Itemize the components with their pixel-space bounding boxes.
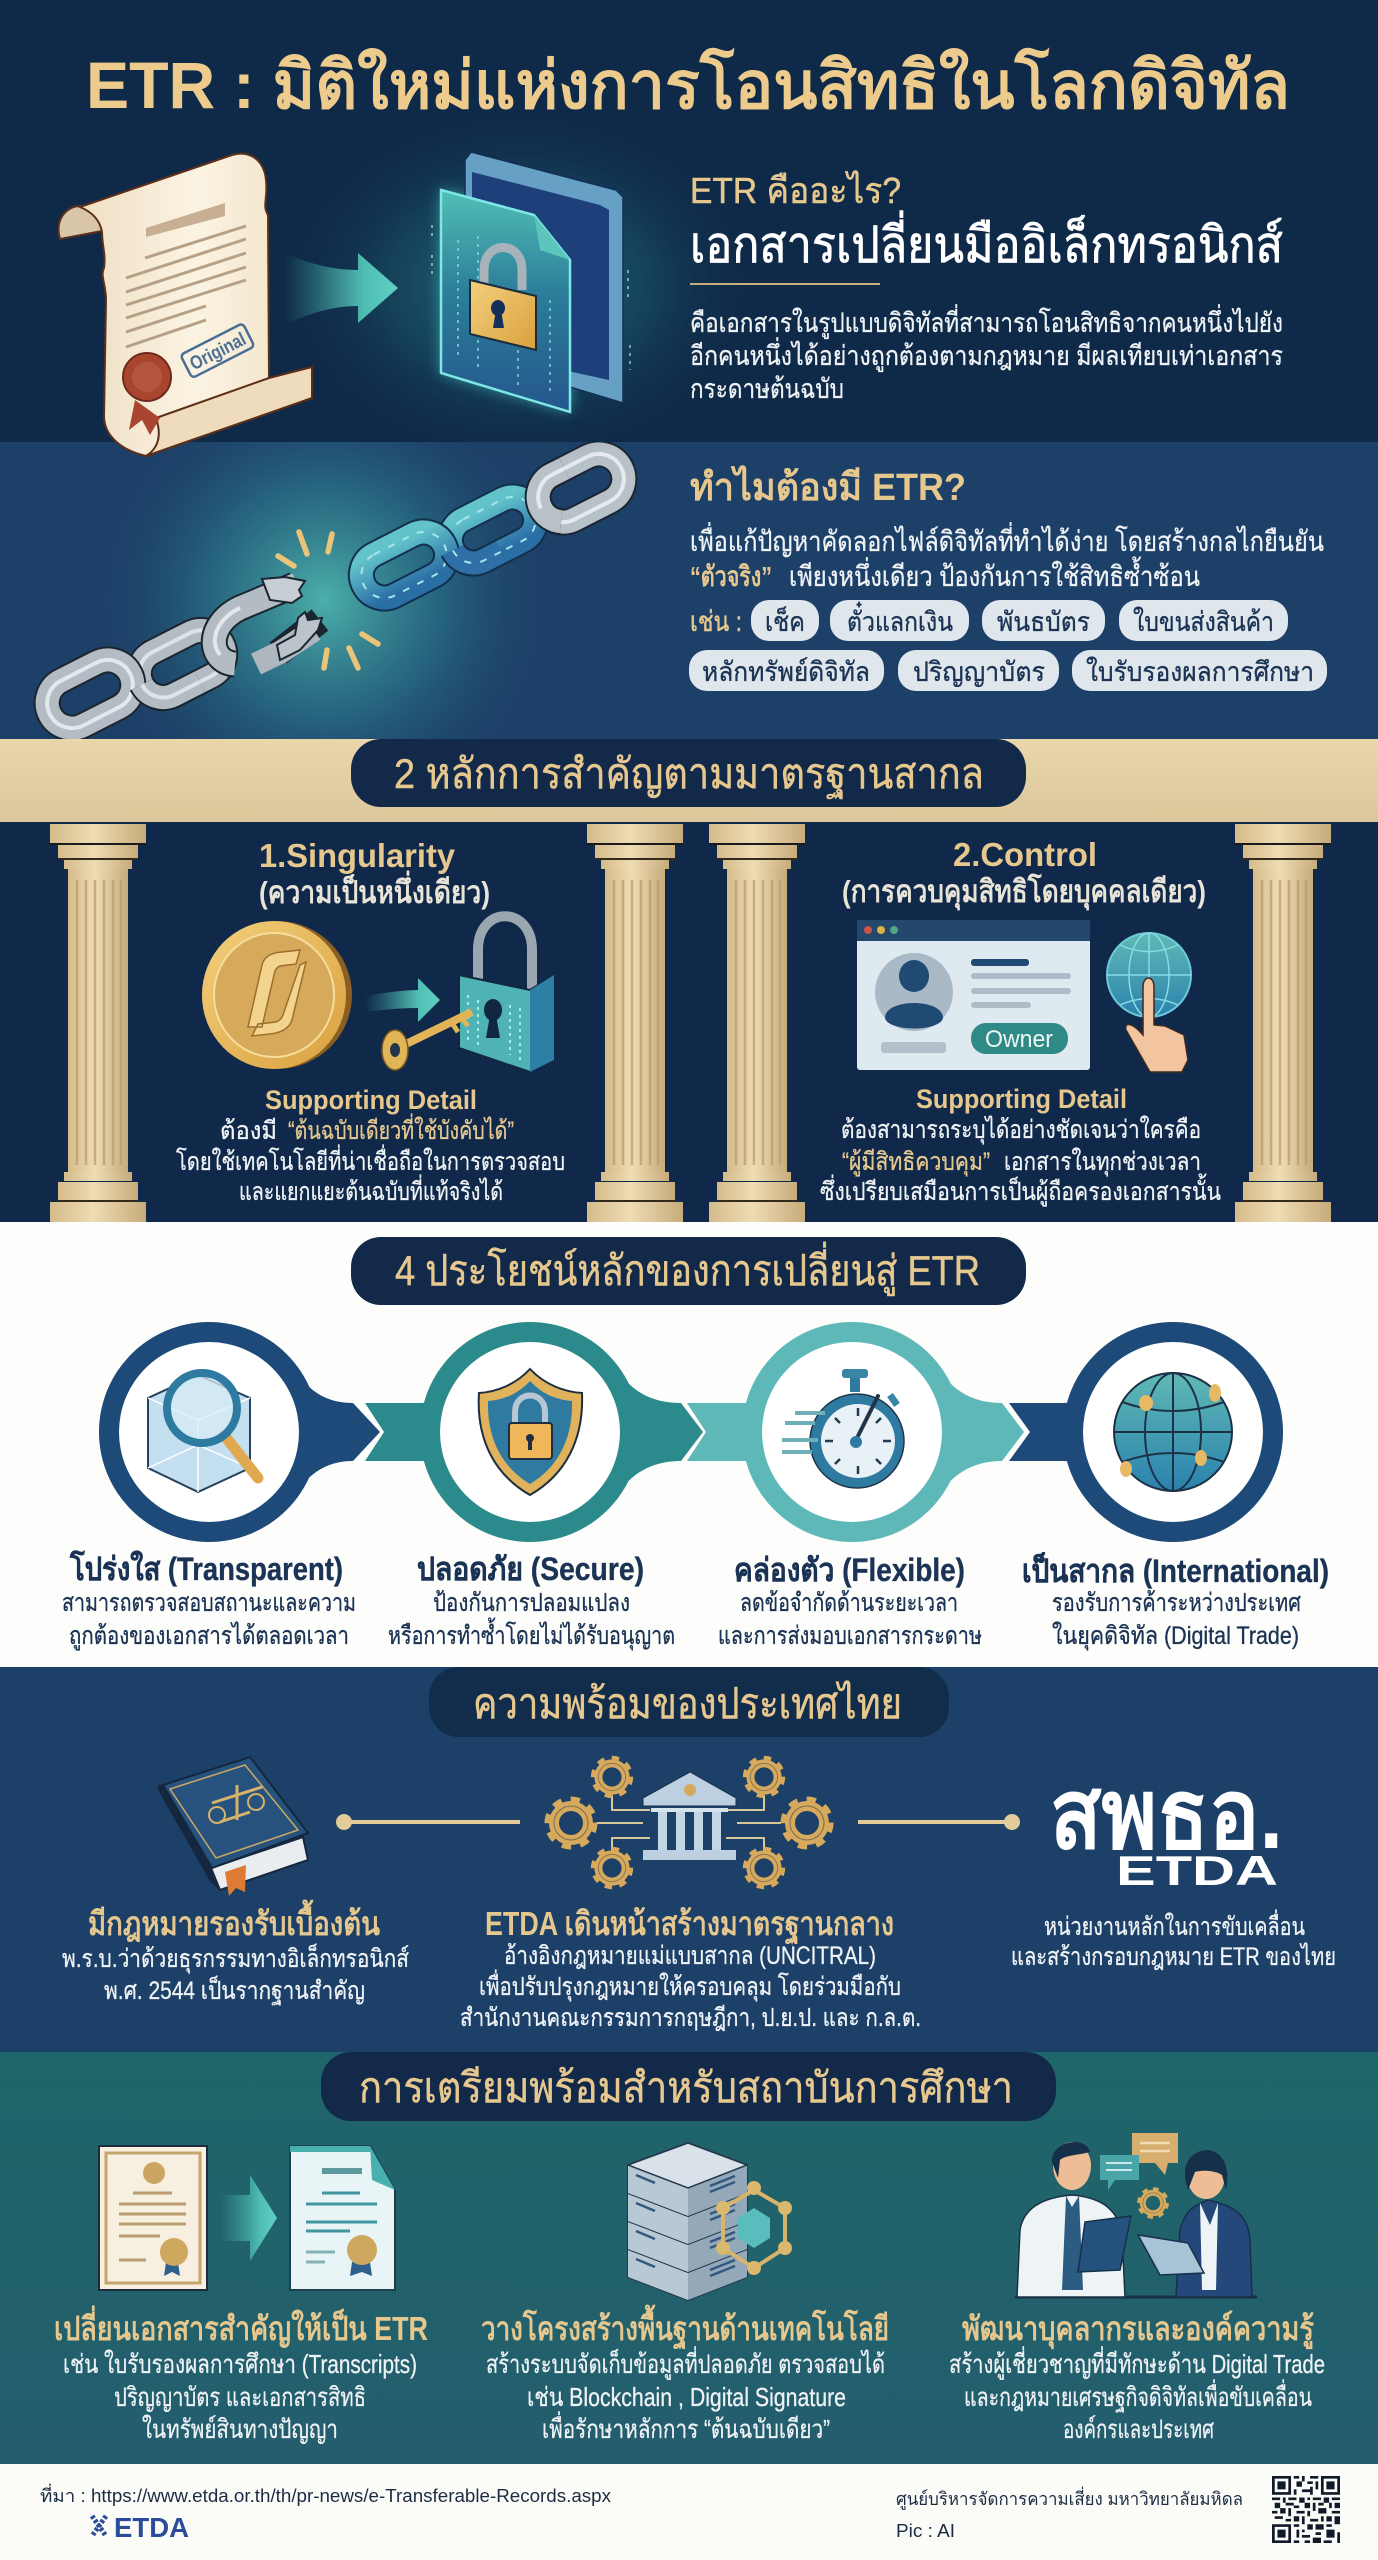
chips: example documents: ตั๋วแลกเงิน xyxy=(847,602,953,637)
text: convert description xyxy=(63,2349,417,2444)
panel: education readiness xyxy=(0,2052,1378,2464)
heading pill: readiness: ความพร้อมของประเทศไทย xyxy=(473,1680,902,1727)
text: control detail xyxy=(820,1115,1221,1207)
heading: singularity: 1.Singularity xyxy=(259,837,456,874)
heading pill: readiness xyxy=(429,1667,949,1737)
label: transparent: โปร่งใส (Transparent) xyxy=(69,1550,343,1587)
text: transparent description xyxy=(62,1589,356,1651)
text: flexible description: และการส่งมอบเอกสารกระดาษ xyxy=(718,1622,982,1650)
heading: supporting detail: Supporting Detail xyxy=(916,1084,1127,1114)
text: control detail: เอกสารในทุกช่วงเวลา xyxy=(1004,1147,1201,1177)
text: ETDA role xyxy=(1011,1909,1336,1971)
text: credit: ศูนย์บริหารจัดการความเสี่ยง มหาวิทยาลัยมหิดล xyxy=(896,2486,1243,2510)
benefit: international xyxy=(1009,1322,1329,1651)
column: standards xyxy=(460,1905,921,2032)
column: singularity xyxy=(176,837,565,1206)
text: transparent description: ถูกต้องของเอกสารได้ตลอดเวลา xyxy=(69,1621,349,1651)
icon: owner profile window xyxy=(857,920,1090,1070)
text: picture credit: Pic : AI xyxy=(896,2521,955,2541)
icon: two professionals xyxy=(1015,2133,1257,2297)
heading: law: มีกฎหมายรองรับเบื้องต้น xyxy=(88,1899,380,1942)
subheading: singularity: (ความเป็นหนึ่งเดียว) xyxy=(259,870,490,910)
text: why ETR explanation: “ตัวจริง” xyxy=(690,561,772,592)
chips: example documents: หลักทรัพย์ดิจิทัล xyxy=(702,656,870,687)
text: infrastructure description: สร้างระบบจัดเก็บข้อมูลที่ปลอดภัย ตรวจสอบได้ xyxy=(486,2346,885,2380)
band: beige header xyxy=(0,739,1378,822)
text: secure description: หรือการทำซ้ำโดยไม่ได้รับอนุญาต xyxy=(388,1617,675,1651)
label: flexible: คล่องตัว (Flexible) xyxy=(734,1552,965,1588)
icon: gold coin xyxy=(202,921,352,1069)
logo: ETDA: ETDA xyxy=(1116,1847,1278,1894)
heading pill: education: การเตรียมพร้อมสำหรับสถาบันการศึกษา xyxy=(359,2064,1013,2111)
text: convert description: ในทรัพย์สินทางปัญญา xyxy=(142,2414,338,2444)
heading: what is ETR: ETR คืออะไร? xyxy=(690,170,901,211)
panel: what is ETR xyxy=(0,0,1378,465)
text: secure description xyxy=(388,1589,675,1651)
heading: supporting detail: Supporting Detail xyxy=(265,1085,477,1115)
text: singularity detail: และแยกแยะต้นฉบับที่แท้จริงได้ xyxy=(239,1174,503,1206)
benefit: transparent xyxy=(62,1322,380,1651)
heading: infrastructure: วางโครงสร้างพื้นฐานด้านเทคโนโลยี xyxy=(481,2304,889,2350)
icon: paper certificate to digital xyxy=(99,2146,395,2290)
icon: stopwatch xyxy=(782,1369,904,1488)
text: law description: พ.ร.บ.ว่าด้วยธุรกรรมทางอิเล็กทรอนิกส์ xyxy=(62,1943,409,1974)
label: international: เป็นสากล (International) xyxy=(1022,1551,1329,1589)
chips: example documents: พันธบัตร xyxy=(997,607,1090,637)
column: infrastructure xyxy=(481,2304,889,2444)
panel: four benefits xyxy=(0,1222,1378,1667)
subheading: control: (การควบคุมสิทธิโดยบุคคลเดียว) xyxy=(842,873,1206,911)
text: standards description: อ้างอิงกฎหมายแม่แบบสากล (UNCITRAL) xyxy=(504,1942,876,1970)
text: infrastructure description xyxy=(486,2346,885,2444)
heading pill: four benefits: 4 ประโยชน์หลักของการเปลี่ยนสู่ ETR xyxy=(395,1242,980,1296)
connector: book to hub xyxy=(336,1814,520,1830)
text: flexible description xyxy=(718,1589,982,1650)
icon: institution with gears xyxy=(549,1759,829,1886)
heading pill: education xyxy=(321,2052,1056,2121)
text: singularity detail xyxy=(176,1113,565,1206)
icon: broken and digital chain xyxy=(39,445,632,737)
text: standards description: เพื่อปรับปรุงกฎหมายให้ครอบคลุม โดยร่วมมือกับ xyxy=(479,1969,901,2002)
text: transparent description: สามารถตรวจสอบสถานะและความ xyxy=(62,1589,356,1617)
panel: why ETR xyxy=(0,365,1378,835)
icon: paper scroll original xyxy=(59,154,312,456)
text: international description: ในยุคดิจิทัล (Digital Trade) xyxy=(1052,1621,1299,1651)
text: control detail: ต้องสามารถระบุได้อย่างชัดเจนว่าใครคือ xyxy=(841,1115,1201,1145)
text: international description: รองรับการค้าระหว่างประเทศ xyxy=(1052,1589,1301,1617)
icon: connected globe xyxy=(1114,1373,1232,1491)
icon: globe with hand xyxy=(1107,933,1191,1072)
icon: law book xyxy=(157,1757,308,1896)
text: infrastructure description: เพื่อรักษาหลักการ “ต้นฉบับเดียว” xyxy=(542,2411,830,2444)
text: control detail: “ผู้มีสิทธิควบคุม” xyxy=(842,1148,990,1177)
label: secure: ปลอดภัย (Secure) xyxy=(417,1551,644,1587)
icon: QR code xyxy=(1272,2476,1340,2543)
text: people description xyxy=(949,2346,1325,2444)
text: why ETR explanation: เพียงหนึ่งเดียว ป้องกันการใช้สิทธิซ้ำซ้อน xyxy=(789,556,1200,592)
chips: example documents xyxy=(689,600,1327,691)
chips: example documents: เช็ค xyxy=(765,604,805,637)
text: singularity detail: โดยใช้เทคโนโลยีที่น่าเชื่อถือในการตรวจสอบ xyxy=(176,1144,565,1176)
text: convert description: เช่น ใบรับรองผลการศึกษา (Transcripts) xyxy=(63,2349,417,2379)
text: secure description: ป้องกันการปลอมแปลง xyxy=(433,1589,630,1617)
heading: why ETR: ทำไมต้องมี ETR? xyxy=(690,465,966,509)
heading: standards: ETDA เดินหน้าสร้างมาตรฐานกลาง xyxy=(485,1905,894,1945)
heading pill: four benefits xyxy=(351,1237,1026,1305)
column: convert documents xyxy=(54,2305,428,2444)
icon: shield with padlock xyxy=(479,1369,582,1495)
text: ETDA role: หน่วยงานหลักในการขับเคลื่อน xyxy=(1044,1909,1305,1941)
text: control detail: ซึ่งเปรียบเสมือนการเป็นผู้ถือครองเอกสารนั้น xyxy=(820,1173,1221,1207)
heading pill: two principles: 2 หลักการสำคัญตามมาตรฐานสากล xyxy=(394,750,984,799)
text: definition body: อีกคนหนึ่งได้อย่างถูกต้องตามกฎหมาย มีผลเทียบเท่าเอกสาร xyxy=(690,337,1283,372)
text: singularity detail: “ต้นฉบับเดียวที่ใช้บังคับได้” xyxy=(288,1113,514,1145)
column: control xyxy=(820,836,1221,1207)
text: infrastructure description: เช่น Blockchain , Digital Signature xyxy=(527,2382,846,2412)
logo: ETDA small: ETDA xyxy=(114,2512,189,2543)
icon: paper scroll original: Original xyxy=(187,329,250,375)
text: standards description xyxy=(460,1942,921,2032)
benefit: secure xyxy=(365,1322,703,1651)
panel: Thailand readiness xyxy=(0,1667,1378,2052)
connector: hub to ETDA xyxy=(858,1814,1020,1830)
arrow: paper to digital xyxy=(285,253,398,325)
icon: cube and magnifier xyxy=(148,1373,258,1492)
text: law description xyxy=(62,1943,409,2005)
text: definition body xyxy=(690,304,1283,404)
column: law xyxy=(62,1899,409,2005)
text: international description xyxy=(1052,1589,1301,1651)
text: flexible description: ลดข้อจำกัดด้านระยะเวลา xyxy=(740,1589,958,1617)
label: owner: Owner xyxy=(985,1026,1053,1053)
text: law description: พ.ศ. 2544 เป็นรากฐานสำคัญ xyxy=(104,1975,365,2005)
heading: control: 2.Control xyxy=(953,836,1097,873)
pillars xyxy=(50,824,1331,1222)
title: ETR : มิติใหม่แห่งการโอนสิทธิในโลกดิจิทัล xyxy=(86,46,1290,122)
text: why ETR explanation xyxy=(690,522,1324,637)
chips: example documents: ใบขนส่งสินค้า xyxy=(1133,606,1274,637)
heading: convert documents: เปลี่ยนเอกสารสำคัญให้เป็น ETR xyxy=(54,2305,428,2348)
column: people and knowledge xyxy=(949,2310,1325,2444)
benefit: flexible xyxy=(687,1322,1024,1650)
text: people description: องค์กรและประเทศ xyxy=(1063,2414,1214,2444)
panel: footer xyxy=(0,2464,1378,2560)
heading: definition: เอกสารเปลี่ยนมืออิเล็กทรอนิกส์ xyxy=(690,211,1283,273)
arrow xyxy=(365,978,440,1022)
text: why ETR explanation: เช่น : xyxy=(690,606,742,637)
chips: example documents: ปริญญาบัตร xyxy=(913,657,1045,687)
heading pill: two principles xyxy=(351,739,1026,807)
logo: ETDA: สพธอ. xyxy=(1050,1759,1283,1869)
heading: people: พัฒนาบุคลากรและองค์ความรู้ xyxy=(962,2310,1314,2350)
text: standards description: สำนักงานคณะกรรมการกฤษฎีกา, ป.ย.ป. และ ก.ล.ต. xyxy=(460,2004,921,2032)
icon: server stack with blockchain xyxy=(628,2143,792,2300)
panel: two principles xyxy=(0,739,1378,1222)
text: convert description: ปริญญาบัตร และเอกสารสิทธิ xyxy=(114,2382,366,2412)
text: singularity detail: ต้องมี xyxy=(220,1117,277,1145)
chips: example documents: ใบรับรองผลการศึกษา xyxy=(1086,656,1314,687)
text: source: ที่มา : https://www.etda.or.th/th/pr-news/e-Transferable-Records.aspx xyxy=(40,2483,611,2506)
icon: digital padlock and key xyxy=(382,916,554,1072)
icon: digital document with padlock xyxy=(432,152,630,412)
text: definition body: กระดาษต้นฉบับ xyxy=(690,374,844,404)
